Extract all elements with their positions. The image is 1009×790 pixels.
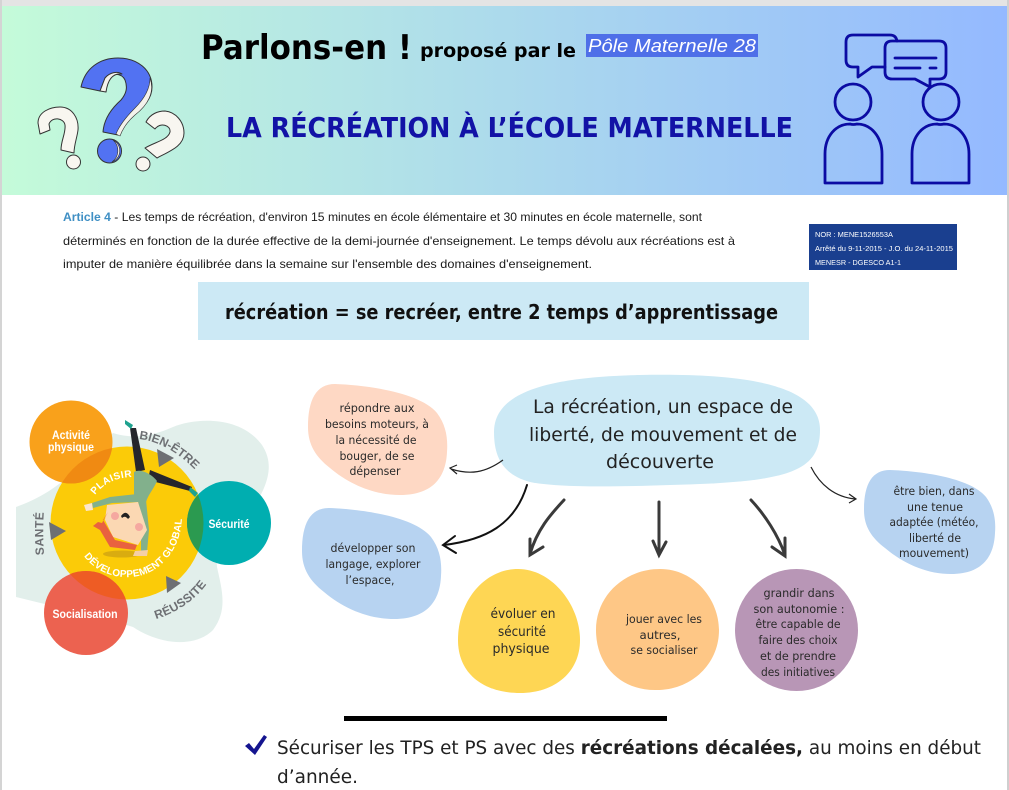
divider bar bbox=[344, 716, 667, 721]
concept map bbox=[302, 375, 995, 693]
arrow: to langage bbox=[443, 485, 527, 553]
bubble: socialiser: autres, bbox=[640, 628, 680, 642]
text block: Article 4 bbox=[63, 210, 735, 271]
bubble: besoins moteurs: bouger, de se bbox=[340, 449, 414, 463]
bubble: tenue adaptée: adaptée (météo, bbox=[890, 515, 978, 529]
bubble: besoins moteurs: répondre aux bbox=[340, 401, 415, 415]
icon: question marks bbox=[38, 58, 184, 171]
circle: Sécurité: Sécurité bbox=[208, 519, 250, 531]
bubble: central idea: La récréation, un espace de bbox=[533, 396, 793, 418]
curved labels: RÉUSSITE bbox=[154, 580, 206, 619]
bubble: tenue adaptée: une tenue bbox=[907, 500, 963, 514]
circle: Sécurité bbox=[187, 481, 271, 565]
bubble: socialiser: jouer avec les bbox=[625, 612, 702, 626]
text block: Article 4: Article 4 - Les temps de récréation, d'environ 15 minutes en école élémentaire et 30 minutes en école maternelle, sont bbox=[63, 210, 703, 224]
tag: Pôle Maternelle 28: Pôle Maternelle 28 bbox=[588, 36, 756, 56]
illustration: global development diagram: DÉVELOPPEMENT GLOBAL bbox=[84, 519, 182, 578]
bubble: langage: développer son bbox=[330, 541, 416, 555]
bubble: central idea: découverte bbox=[606, 451, 714, 473]
bubble: autonomie: faire des choix bbox=[758, 633, 838, 647]
arrow: to autonomie bbox=[751, 500, 785, 556]
bubble: autonomie: son autonomie : bbox=[754, 602, 844, 616]
reference box: NOR bbox=[809, 224, 957, 270]
bullet: décalées: d’année. bbox=[277, 766, 358, 788]
icon: two people talking bbox=[825, 35, 969, 183]
bubble: sécurité physique: évoluer en bbox=[490, 607, 556, 622]
bubble: autonomie: et de prendre bbox=[760, 649, 836, 663]
bubble: besoins moteurs bbox=[308, 384, 447, 495]
yellow circle bbox=[50, 446, 204, 600]
illustration: global development diagram: PLAISIR bbox=[90, 470, 132, 494]
bubble: langage bbox=[302, 508, 441, 619]
bubble: besoins moteurs: besoins moteurs, à bbox=[325, 417, 429, 431]
circle: Activité physique: Activité bbox=[52, 430, 90, 442]
reference box: NOR: Arrêté du 9-11-2015 - J.O. du 24-11-2015 bbox=[815, 246, 953, 253]
main title: LA RÉCRÉATION À L’ÉCOLE MATERNELLE bbox=[226, 110, 793, 144]
text block: Article 4: imputer de manière équilibrée dans la semaine sur l'ensemble des domaines d'enseignement. bbox=[63, 257, 592, 271]
bubble: central idea bbox=[494, 375, 820, 486]
subtitle: proposé par le: proposé par le bbox=[420, 40, 576, 62]
curved labels bbox=[33, 430, 206, 619]
bullet: décalées bbox=[245, 735, 981, 788]
arrow: to besoins moteurs bbox=[450, 460, 503, 474]
bubble: sécurité physique: sécurité bbox=[498, 625, 546, 640]
panel: header banner bbox=[2, 6, 1007, 195]
illustration: global development diagram bbox=[16, 400, 271, 655]
arrow: to tenue adaptée bbox=[811, 467, 856, 503]
bubble: tenue adaptée: être bien, dans bbox=[894, 484, 975, 498]
circle: Activité physique bbox=[30, 400, 112, 484]
bubble: tenue adaptée bbox=[864, 470, 995, 574]
circle: Socialisation: Socialisation bbox=[52, 609, 118, 621]
bubble: sécurité physique bbox=[458, 569, 580, 693]
bubble: autonomie bbox=[735, 569, 858, 691]
curved labels: SANTÉ bbox=[33, 512, 44, 555]
bubble: tenue adaptée: mouvement) bbox=[899, 546, 969, 560]
child doing a cartwheel bbox=[84, 420, 198, 558]
bubble: socialiser bbox=[596, 569, 719, 690]
circle: Activité physique: physique bbox=[48, 442, 94, 454]
bubble: autonomie: des initiatives bbox=[761, 665, 835, 679]
reference box: NOR: NOR : MENE1526553A bbox=[815, 232, 893, 239]
bubble: socialiser: se socialiser bbox=[630, 643, 698, 657]
bullet: décalées: Sécuriser les TPS et PS avec des récréations décalées, au moins en début bbox=[277, 737, 981, 759]
arrow: to jeu bbox=[653, 502, 666, 555]
bubble: tenue adaptée: liberté de bbox=[909, 531, 961, 545]
icon: check mark bbox=[245, 735, 267, 755]
title: Parlons-en: Parlons-en ! bbox=[201, 28, 412, 68]
curved labels: BIEN-ÊTRE bbox=[140, 430, 200, 469]
bubble: autonomie: être capable de bbox=[756, 617, 840, 631]
bubble: langage: l’espace, bbox=[346, 573, 394, 587]
background blob bbox=[16, 421, 269, 642]
reference box: NOR: MENESR - DGESCO A1-1 bbox=[815, 260, 901, 267]
bubble: central idea: liberté, de mouvement et de bbox=[529, 424, 797, 446]
circle: Socialisation bbox=[44, 571, 128, 655]
bubble: langage: langage, explorer bbox=[326, 557, 421, 571]
arrow: to sécurité physique bbox=[530, 500, 564, 555]
bubble: sécurité physique: physique bbox=[492, 642, 550, 657]
grey arrowheads bbox=[49, 449, 181, 593]
bubble: besoins moteurs: la nécessité de bbox=[336, 433, 416, 447]
bubble: besoins moteurs: dépenser bbox=[350, 464, 401, 478]
bubble: autonomie: grandir dans bbox=[764, 586, 835, 600]
text block: Article 4: déterminés en fonction de la durée effective de la demi-journée d'enseignement. Le temps dévolu aux récréations est à bbox=[63, 234, 735, 248]
definition band: récréation = se recréer, entre 2 temps d’apprentissage bbox=[225, 300, 778, 324]
definition band bbox=[198, 282, 809, 340]
